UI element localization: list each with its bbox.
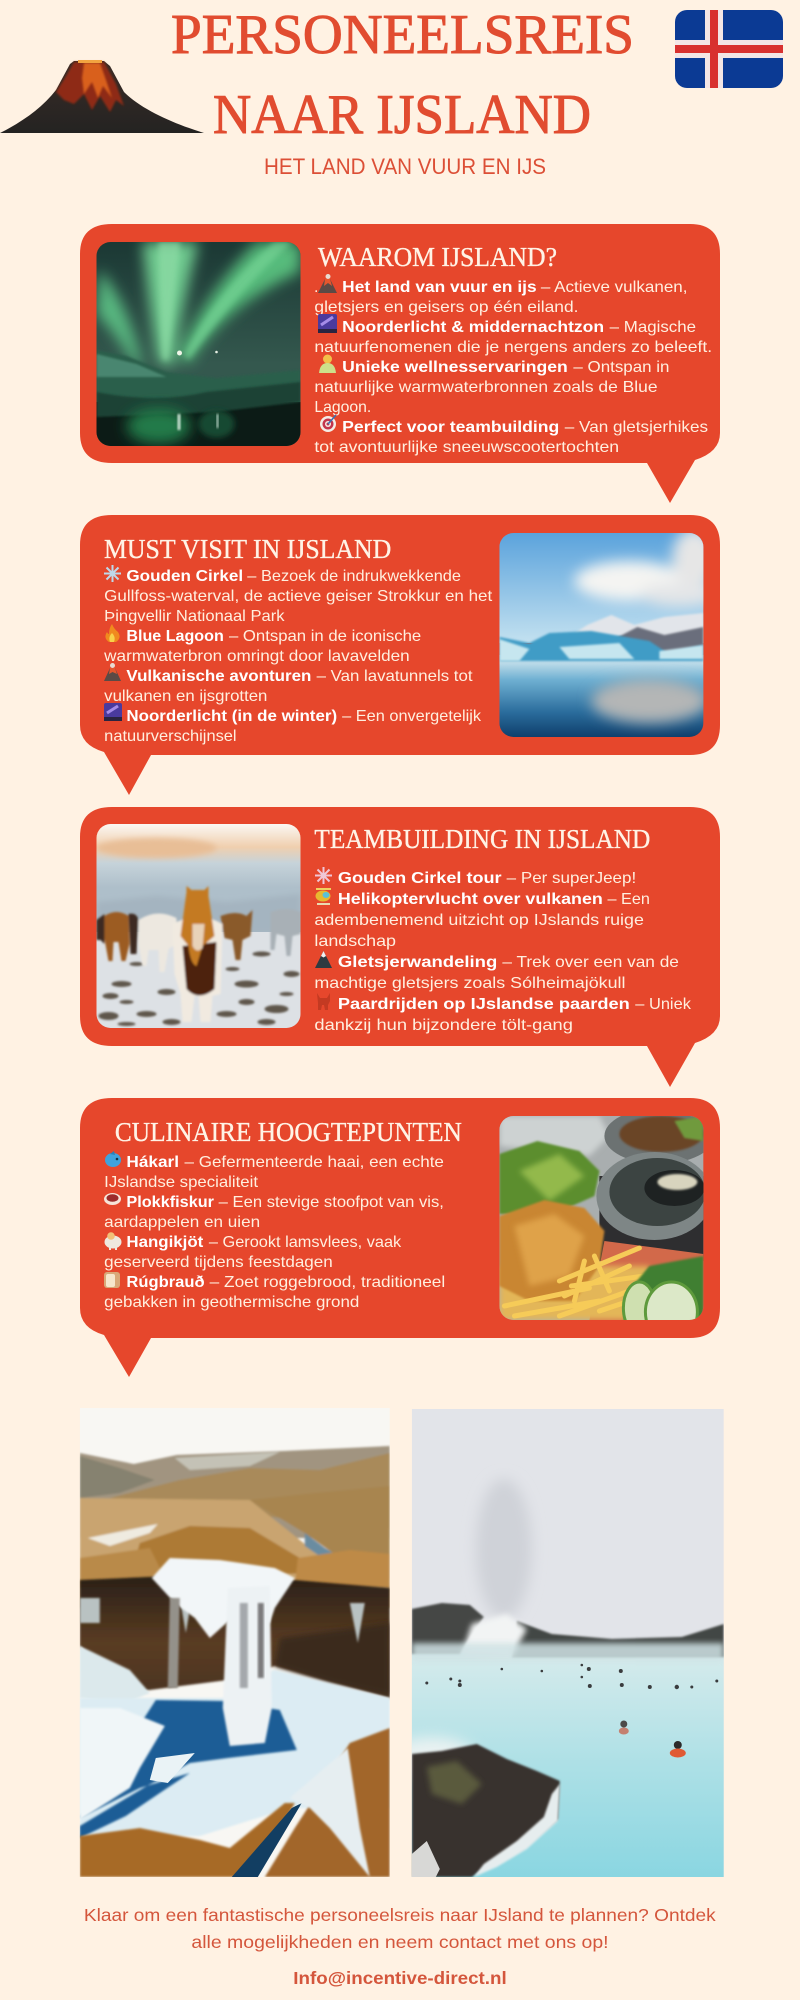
text block: activiteiten: machtige gletsjers zoals Sólheimajökull	[314, 975, 626, 992]
text block: redenen: – Van gletsjerhikes	[565, 419, 708, 436]
text block: redenen	[314, 274, 712, 456]
icon: volcano illustration	[0, 60, 204, 133]
bathers	[619, 1720, 686, 1758]
text block: redenen: gletsjers en geisers op één eiland.	[314, 299, 578, 316]
heading: teambuilding: TEAMBUILDING IN IJSLAND	[314, 824, 650, 854]
text block: gerechten: IJslandse specialiteit	[104, 1174, 259, 1191]
text block: redenen: – Ontspan in	[573, 359, 670, 376]
footer call to action	[84, 1905, 716, 1952]
text block: bezienswaardigheden: Gullfoss-waterval, de actieve geiser Strokkur en het	[104, 588, 493, 605]
photo: food	[499, 1116, 704, 1320]
text block: bezienswaardigheden: vulkanen en ijsgrotten	[104, 688, 267, 705]
title: NAAR IJSLAND	[213, 84, 591, 146]
text block: redenen: natuurfenomenen die je nergens anders zo beleeft.	[314, 339, 712, 356]
icon: snowflake	[104, 565, 121, 582]
text block: activiteiten: – Trek over een van de	[502, 954, 679, 971]
icon: mountain	[315, 951, 332, 968]
text block: bezienswaardigheden: warmwaterbron omringt door lavavelden	[103, 648, 410, 665]
text block: redenen: Unieke wellnesservaringen	[342, 359, 568, 376]
icon: volcano	[318, 274, 337, 293]
icon: horse	[317, 993, 330, 1010]
photo: blue lagoon	[387, 1409, 724, 1877]
text block: gerechten	[104, 1151, 445, 1311]
text block: bezienswaardigheden: – Ontspan in de iconische	[229, 628, 421, 645]
text block: activiteiten: – Per superJeep!	[507, 870, 636, 887]
text block: gerechten: gebakken in geothermische grond	[104, 1294, 359, 1311]
text block: gerechten: – Gerookt lamsvlees, vaak	[209, 1234, 402, 1251]
text block: redenen: – Actieve vulkanen,	[541, 279, 688, 296]
text block: bezienswaardigheden: Blue Lagoon	[126, 628, 224, 645]
text block: bezienswaardigheden: – Bezoek de indrukwekkende	[247, 568, 461, 585]
text block: gerechten: Plokkfiskur	[126, 1194, 214, 1211]
photo: waterfall	[80, 1408, 390, 1877]
text block: bezienswaardigheden: – Een onvergetelijk	[342, 708, 482, 725]
icon: snowflake	[315, 867, 332, 884]
text block: gerechten: Hangikjöt	[126, 1234, 204, 1251]
text block: gerechten: aardappelen en uien	[104, 1214, 260, 1231]
title	[171, 4, 634, 146]
text block: gerechten: – Zoet roggebrood, traditioneel	[210, 1274, 445, 1291]
panel: culinaire hoogtepunten	[80, 1098, 720, 1377]
text block: gerechten: – Een stevige stoofpot van vis,	[219, 1194, 444, 1211]
icon: night sky	[104, 703, 122, 721]
text block: gerechten: Rúgbrauð	[126, 1274, 205, 1291]
text block: activiteiten: Paardrijden op IJslandse paarden	[338, 996, 630, 1013]
text block: redenen: – Magische	[610, 319, 696, 336]
text block: activiteiten	[314, 867, 692, 1034]
text block: activiteiten: landschap	[314, 933, 396, 950]
heading: must visit: MUST VISIT IN IJSLAND	[104, 534, 391, 564]
text block: bezienswaardigheden: Þingvellir Nationaal Park	[104, 608, 286, 625]
text block: gerechten: – Gefermenteerde haai, een echte	[184, 1154, 444, 1171]
text block: activiteiten: Gletsjerwandeling	[338, 954, 497, 971]
panel: teambuilding	[80, 807, 720, 1087]
photo: northern lights	[96, 242, 300, 446]
icon: night sky	[318, 314, 337, 333]
icon: volcano	[104, 663, 121, 681]
icon: fish	[105, 1151, 121, 1167]
panel: waarom IJsland	[80, 224, 720, 503]
panel: must visit	[80, 515, 720, 795]
text block: redenen: .	[314, 279, 318, 296]
icon: person in wellness	[319, 354, 336, 373]
icon: helicopter	[316, 888, 331, 905]
photo: Icelandic horses	[96, 824, 300, 1028]
footer call to action: alle mogelijkheden en neem contact met ons op!	[191, 1932, 609, 1952]
text block: activiteiten: Helikoptervlucht over vulkanen	[338, 891, 603, 908]
heading: waarom IJsland: WAAROM IJSLAND?	[318, 242, 557, 272]
text block: activiteiten: dankzij hun bijzondere tölt-gang	[314, 1017, 573, 1034]
heading: culinaire hoogtepunten: CULINAIRE HOOGTEPUNTEN	[115, 1117, 462, 1147]
text block: gerechten: geserveerd tijdens feestdagen	[104, 1254, 333, 1271]
footer call to action: Klaar om een fantastische personeelsreis naar IJsland te plannen? Ontdek	[84, 1905, 716, 1925]
text block: redenen: Het land van vuur en ijs	[342, 279, 537, 296]
icon: sheep	[104, 1232, 122, 1250]
text block: bezienswaardigheden: Gouden Cirkel	[126, 568, 243, 585]
text block: bezienswaardigheden	[103, 565, 493, 745]
title: PERSONEELSREIS	[171, 4, 634, 66]
icon: flag of Iceland	[675, 10, 783, 88]
text block: redenen: natuurlijke warmwaterbronnen zoals de Blue	[314, 379, 658, 396]
text block: bezienswaardigheden: – Van lavatunnels tot	[317, 668, 473, 685]
icon: target	[320, 415, 336, 432]
text block: redenen: tot avontuurlijke sneeuwscootertochten	[314, 439, 619, 456]
text block: activiteiten: Gouden Cirkel tour	[338, 870, 502, 887]
photo: glacier lagoon	[499, 528, 719, 737]
text block: activiteiten: – Een	[608, 891, 650, 908]
text block: redenen: Perfect voor teambuilding	[342, 419, 559, 436]
text block: gerechten: Hákarl	[126, 1154, 179, 1171]
text block: bezienswaardigheden: Vulkanische avonturen	[126, 668, 311, 685]
subtitle: HET LAND VAN VUUR EN IJS	[264, 154, 546, 179]
icon: flame	[105, 624, 120, 642]
text block: bezienswaardigheden: natuurverschijnsel	[104, 728, 237, 745]
icon: bread	[104, 1272, 120, 1288]
text block: activiteiten: adembenemend uitzicht op IJslands ruige	[314, 912, 644, 929]
text block: bezienswaardigheden: Noorderlicht (in de winter)	[126, 708, 337, 725]
contact email: Info@incentive-direct.nl	[293, 1968, 507, 1988]
text block: activiteiten: – Uniek	[635, 996, 692, 1013]
text block: redenen: Noorderlicht & middernachtzon	[342, 319, 604, 336]
icon: steak	[104, 1193, 121, 1205]
text block: redenen: Lagoon.	[314, 399, 371, 416]
